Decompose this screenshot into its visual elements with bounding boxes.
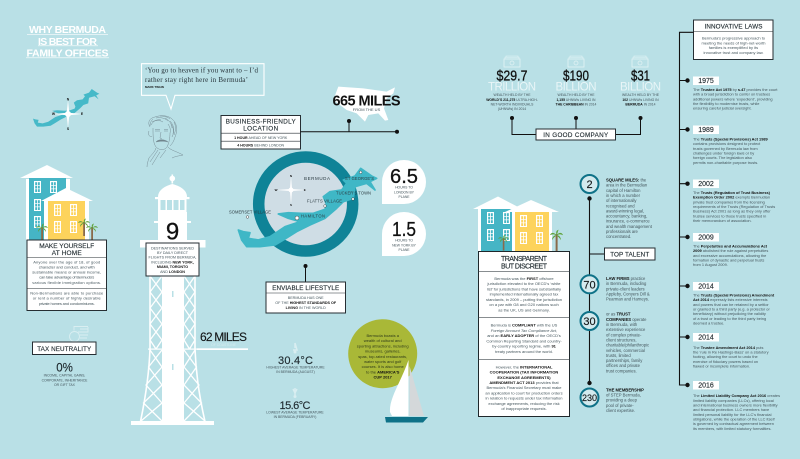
callout: culture and America's Cup: water sports and golf (364, 359, 402, 364)
panel: transparent but discreet: treaty partners around the world. (495, 349, 553, 354)
compass: N (290, 174, 292, 178)
illustration: white house left (20, 165, 98, 241)
callout: Mark Twain quote: MARK TWAIN (145, 85, 164, 89)
entry: 2002: exempts Bermudian (734, 195, 770, 200)
timeline: top talent (580, 175, 655, 406)
text: law firms: LAW FIRMS (606, 276, 630, 281)
panel: transparent but discreet: in relation to requests under tax information (486, 396, 562, 401)
entry: 2009: 2009 (693, 248, 702, 253)
panel: innovative laws: families is exemplified by its (709, 45, 758, 50)
entry: 2002: private trust companies from the licensing (693, 199, 765, 204)
panel: transparent but discreet: Bermuda is COMPLIANT with the US (491, 323, 558, 328)
entry: 2016: limited personal liability for the LLC’s financial (693, 412, 772, 417)
panel: transparent but discreet: standards, in 2009 – putting the jurisdiction (486, 297, 562, 302)
map: Bermuda in ring (238, 157, 377, 251)
entry: 2002: 2002 (698, 181, 714, 188)
panel: transparent but discreet: by-country reporting regime, with 91 (492, 344, 557, 348)
panel: tax neutrality (32, 342, 96, 387)
entry: 2014 trustee amendment: exercise of fiduciary powers based on (693, 359, 758, 364)
stat: Bermuda wealth: 102 UHNWIs LIVING IN (622, 98, 659, 102)
entry: 2014 trustee amendment (693, 333, 769, 368)
entry: 2016: limited liability companies (LLCs), offering local (693, 398, 774, 403)
panel: innovative laws: INNOVATIVE LAWS (704, 24, 762, 30)
stat: Caribbean wealth: $190 (563, 68, 589, 84)
entry: 2014 trusts amendment: and powers that can be retained by a settlor (693, 302, 769, 307)
panel: transparent but discreet (478, 252, 570, 416)
callout: Mark Twain quote: ‘You go to heaven if you want to – I’d (145, 67, 258, 75)
panel: make yourself at home: various flexible immigration options. (32, 280, 101, 285)
text: law firms: Pearman and Harneys. (606, 297, 649, 302)
callout: culture and America's Cup (348, 319, 417, 388)
text: square miles: accountancy, banking, (606, 214, 647, 219)
stat: hours to New York (382, 212, 426, 256)
compass: W (275, 188, 278, 192)
text: trust companies: trust companies. (606, 368, 637, 373)
text: trust companies: charitable/philanthropic (606, 343, 649, 348)
text: trust companies: client structures, (606, 337, 636, 342)
title (26, 24, 109, 60)
text: STEP membership: pool of private- (606, 403, 634, 408)
panel: tax neutrality: 0% (56, 362, 73, 374)
text: trust companies: partnerships, family (606, 358, 643, 363)
panel: business-friendly location: LOCATION (243, 125, 279, 132)
stat: hours to London: 6.5 (390, 166, 418, 188)
text: trust companies: operate (631, 317, 647, 322)
callout: culture and America's Cup: wealth of cultural and (364, 338, 402, 343)
text: trust companies: of complex private- (606, 332, 642, 337)
text: square miles: SQUARE MILES: (606, 178, 639, 182)
panel: transparent but discreet: Common Reporting Standard and country- (486, 338, 562, 343)
badge: 70: 70 (583, 280, 596, 292)
panel: make yourself at home: Non-Bermudians are able to purchase (30, 290, 104, 296)
entry: 1975: the flexibility to modernise trusts, while (693, 101, 759, 106)
entry: 2014 trustee amendment: 2014 (698, 335, 714, 342)
entry: 1975 (693, 76, 778, 111)
panel: enviable lifestyle: BERMUDA HAS ONE (288, 296, 324, 300)
stat: highest temperature: HIGHEST AVERAGE TEMPERATURE (266, 366, 325, 370)
panel: transparent but discreet: an application to court for production orders (485, 390, 563, 395)
text: trust companies: in Bermuda, with (606, 322, 638, 327)
entry: 2016: its members, with limited statutory formalities. (693, 426, 771, 431)
panel: tax neutrality: INCOME, CAPITAL GAINS, (44, 374, 85, 378)
stat: nine destinations (146, 218, 199, 276)
text: law firms: in Bermuda, including (606, 281, 647, 286)
stat: lowest temperature: IN BERMUDA (FEBRUARY) (274, 415, 316, 419)
panel: transparent but discreet: on a par with G8 and G20 nations such (489, 302, 559, 307)
callout: culture and America's Cup: CUP 2017 (374, 375, 393, 380)
compass: S (290, 203, 292, 207)
timeline: top talent: TOP TALENT (610, 252, 649, 258)
panel: business-friendly location: 1 HOUR AHEAD OF NEW YORK (234, 136, 288, 140)
entry: 2014 trusts amendment: Act 2014 (693, 297, 710, 302)
panel: enviable lifestyle: LIVING IN THE WORLD (286, 306, 326, 310)
text: square miles: the (639, 178, 647, 182)
panel: make yourself at home: MAKE YOURSELF (39, 243, 94, 250)
text: trust companies: TRUST (616, 312, 631, 317)
text: trust companies: offices and private (606, 363, 641, 368)
stat: world wealth: (UHNWIs) IN 2014 (498, 107, 526, 111)
panel: business-friendly location: 4 HOURS BEHIND LONDON (237, 144, 285, 148)
icon: small Bermuda map with compass: W (52, 112, 56, 116)
stat: lowest temperature: LOWEST AVERAGE TEMPERATURE (266, 410, 324, 414)
entry: 1989: trusts governed by Bermuda law from (693, 146, 758, 151)
text: trust companies: extensive experience (606, 327, 646, 332)
stat: nine destinations: DESTINATIONS SERVED (151, 246, 194, 250)
text: square miles: capital of Hamilton (606, 188, 641, 193)
entry: 2002 (693, 180, 775, 223)
stat: Caribbean wealth: 1,155 UHNWIs LIVING IN (556, 98, 596, 102)
stat: nine destinations: BY DAILY DIRECT (157, 251, 189, 255)
text: square miles: recognised and (606, 203, 635, 208)
entry: 2014 trusts amendment: 2014 (698, 284, 714, 291)
panel: transparent but discreet: COOPERATION (TAX INFORMATION (490, 370, 558, 375)
icon: small Bermuda map with compass: E (81, 112, 84, 116)
text: trust companies: or as (606, 312, 616, 317)
panel: transparent but discreet: as the UK, US and Germany. (498, 308, 550, 312)
entry: 2009 (693, 233, 768, 267)
panel: transparent but discreet: AMENDMENT ACT 2013 provides that (489, 380, 559, 385)
entry: 2002: their memorandum of association. (693, 218, 752, 223)
stat: lowest temperature (266, 388, 324, 419)
badge: 230 (580, 388, 598, 406)
stat: hours to London: HOURS TO (395, 186, 413, 190)
map labels: FLATTS VILLAGE (307, 198, 342, 204)
panel: make yourself at home (27, 240, 106, 310)
map labels: SOMERSET VILLAGE (229, 210, 271, 214)
map labels: HAMILTON (301, 214, 325, 218)
panel: enviable lifestyle (266, 264, 346, 313)
stat: hours to London: PLANE (398, 195, 410, 199)
entry: 2014 trusts amendment: beneficiary) without prejudicing the validity (693, 311, 766, 316)
callout: Mark Twain quote: rather stay right here in Bermuda’ (145, 76, 248, 84)
stat: hours to New York: PLANE (398, 248, 410, 252)
text: STEP membership: client expertise. (606, 408, 635, 413)
panel: in good company: IN GOOD COMPANY (543, 132, 609, 139)
title: FAMILY OFFICES (26, 48, 108, 60)
callout: culture and America's Cup: sporting attractions, including (357, 343, 409, 348)
stat: hours to London (382, 160, 426, 204)
panel: transparent but discreet: of inappropriate requests. (501, 406, 547, 411)
callout: culture and America's Cup: courses. It is also home (362, 364, 404, 369)
stat: Bermuda wealth: $31 (631, 68, 650, 84)
stat: Bermuda wealth: BILLION (620, 81, 661, 93)
text: law firms: private-client leaders (606, 286, 645, 291)
stat: hours to New York: 1.5 (392, 219, 416, 241)
panel: transparent but discreet: Foreign Account Tax Compliance Act, (491, 328, 557, 333)
entry: 2014 trusts amendment (693, 282, 775, 325)
badge: 230: 230 (582, 393, 597, 403)
text: square miles: award-winning legal, (606, 208, 644, 213)
callout: Mark Twain quote (142, 64, 264, 109)
map: Bermuda islands (238, 168, 377, 247)
entry: 2009: formation of dynastic and perpetual trusts (693, 257, 764, 262)
stat: Caribbean wealth: THE CARIBBEAN IN 2014 (556, 102, 597, 106)
entry: 2014 trusts amendment: deemed a trustee. (693, 320, 724, 325)
text: law firms: practice (630, 276, 646, 281)
entry: 2009: 2009 (698, 235, 714, 242)
stat: 62 miles: 62 MILES (200, 330, 247, 344)
text: square miles: area in the Bermudian (606, 183, 648, 188)
stat: Bermuda wealth (620, 56, 661, 106)
illustration: lighthouse (131, 174, 214, 425)
callout: culture and America's Cup: Bermuda boasts a (366, 333, 400, 338)
stat: world wealth: WEALTH HELD BY THE (494, 93, 531, 97)
panel: transparent but discreet: However, the INTERNATIONAL (496, 364, 553, 369)
entry: 1989: foreign courts. The legislation also (693, 155, 752, 160)
stat: highest temperature (266, 343, 325, 374)
entry: 1975: The (693, 87, 701, 92)
entry: 1975: 1975 (698, 78, 714, 85)
text: square miles: insurance, e-commerce (606, 219, 650, 224)
text: STEP membership: THE MEMBERSHIP (606, 387, 644, 392)
entry: 2016: and international business owners more flexibility (693, 402, 778, 408)
panel: transparent but discreet: Bermuda’s Financial Secretary must make (486, 385, 562, 390)
stat: hours to London: LONDON BY (394, 190, 415, 194)
panel: transparent but discreet: BUT DISCREET (501, 264, 548, 270)
connector: location to US (300, 119, 399, 134)
callout: culture and America's Cup: spas, top-rated restaurants, (358, 354, 407, 359)
panel: transparent but discreet: Bermuda was the FIRST offshore (494, 276, 554, 281)
stat: world wealth: WORLD’S 211,275 ULTRA-HIGH- (486, 98, 538, 102)
panel: transparent but discreet: implemented internationally agreed tax (490, 292, 558, 297)
map labels (229, 171, 374, 220)
entry: 2014 trusts amendment: expressly lists extensive interests (709, 297, 768, 302)
title: WHY BERMUDA (29, 24, 106, 36)
text: STEP membership: providing a deep (606, 398, 638, 403)
entry: 1989: Trusts (Special Provisions) Act 1989 (701, 136, 769, 142)
distance from the US with map: FROM THE US (353, 107, 381, 112)
text: square miles: and wealth management (606, 224, 653, 229)
panel: make yourself at home: sustainable means or annual income, (32, 270, 101, 275)
entry: 2016: Limited Liability Company Act 2016 creates (701, 393, 780, 398)
panel: transparent but discreet: EXCHANGE AGREEMENTS) (497, 375, 551, 380)
entry: 2016: The (693, 393, 701, 398)
entry: 2002: The (693, 190, 701, 195)
entry: 1989 (693, 126, 769, 165)
entry: 1975: with a broad jurisdiction to confer on trustees (693, 92, 770, 97)
stat: world wealth (486, 56, 538, 111)
panel: make yourself at home: private homes and condominiums. (39, 301, 95, 306)
icon: coins (70, 326, 88, 342)
panel: in good company (510, 116, 642, 140)
title: IS BEST FOR (38, 36, 97, 48)
entry: 2014 trusts amendment: The (693, 292, 701, 298)
panel: make yourself at home: AT HOME (52, 250, 82, 257)
text: square miles: of internationally (606, 198, 637, 203)
panel: transparent but discreet: list’ for jurisdictions that have substantially (487, 286, 561, 291)
badge: 2 (580, 175, 598, 193)
badge: 30 (580, 312, 598, 330)
panel: make yourself at home: character and conduct, and with (39, 264, 95, 270)
panel: tax neutrality: CORPORATE, INHERITANCE (42, 378, 88, 382)
entry: 2002: Exemption Order 2002 (693, 195, 735, 200)
stat: hours to New York: HOURS TO (395, 239, 413, 243)
panel: tax neutrality: TAX NEUTRALITY (37, 346, 92, 353)
stat: world wealth: NET-WORTH INDIVIDUALS (491, 102, 534, 106)
stat: 62 miles: OF COASTLINE (211, 343, 237, 347)
entry: 1975: Trustee Act 1975 by s.47 provides the court (701, 87, 777, 92)
entry: 2016 (693, 381, 780, 431)
entry: 1975: ensuring careful judicial oversight. (693, 106, 752, 111)
icon: small Bermuda map with compass (33, 89, 99, 131)
text: law firms: Appleby, Conyers Dill & (606, 291, 650, 296)
panel: transparent but discreet: TRANSPARENT (501, 256, 548, 263)
stat: nine destinations: FLIGHTS FROM BERMUDA, (149, 256, 196, 260)
entry: 2009: from 1 August 2009. (693, 262, 728, 267)
panel: business-friendly location (221, 116, 300, 149)
entry: 2016: obligations, while the operation of the LLC itself (693, 416, 775, 421)
entry: 2009: The (693, 244, 701, 248)
icon: small Bermuda map with compass: N (67, 98, 70, 102)
stat: Caribbean wealth: BILLION (556, 81, 596, 93)
entry: 2014 trustee amendment: the ‘rule in Re Hastings-Bass’ on a statutory (693, 349, 769, 354)
entry: 1989: 1989 (698, 127, 714, 134)
panel: innovative laws (694, 20, 773, 60)
stat: highest temperature: IN BERMUDA (AUGUST) (276, 370, 315, 374)
panel: transparent but discreet: and an EARLY ADOPTER of the OECD’s (487, 333, 561, 338)
entry: 2002: Business) Act 2001 as long as they only offer (693, 209, 771, 214)
text: square miles: in which a number (606, 193, 641, 198)
illustration: houses centre (473, 196, 563, 252)
compass (275, 174, 306, 207)
entry: 2009: and excessive accumulations, allowing the (693, 253, 766, 258)
badge: 2: 2 (586, 179, 593, 191)
entry: 2016: and financial protection. LLC members have (693, 407, 769, 412)
entry: 2002: trustee services to those trusts specified in (693, 213, 766, 218)
map labels: ST GEORGE’S (345, 176, 374, 181)
panel: transparent but discreet: jurisdiction elevated to the OECD’s ‘white (486, 281, 561, 286)
panel: enviable lifestyle: ENVIABLE LIFESTYLE (272, 285, 339, 292)
entry: 1975: additional powers where ‘expedient’, providing (693, 96, 773, 101)
panel: make yourself at home: Anyone over the age of 18, of good (33, 260, 100, 264)
text: square miles: professionals are (606, 229, 639, 234)
panel: business-friendly location: BUSINESS-FRIENDLY (226, 119, 296, 126)
stat: 62 miles (197, 330, 248, 350)
entry: 1989: contains provisions designed to protect (693, 141, 761, 146)
map labels: TUCKER’S TOWN (336, 190, 371, 196)
text: trust companies: COMPANIES (606, 317, 631, 322)
badge: 30: 30 (583, 316, 596, 328)
entry: 2014 trustee amendment: Trustee Amendment Act 2014 puts (701, 345, 763, 350)
panel: innovative laws: innovative trust and company law. (703, 50, 764, 55)
entry: 2002: Trusts (Regulation of Trust Business) (701, 190, 771, 195)
entry: 1989: challenges under foreign laws or by (693, 150, 754, 155)
entry: 2016: 2016 (698, 383, 714, 390)
stat: Bermuda wealth: BERMUDA IN 2014 (625, 102, 656, 106)
badge: 70 (580, 275, 598, 293)
text: STEP membership: of STEP Bermuda, (606, 393, 641, 398)
stat: world wealth: TRILLION (488, 81, 536, 93)
stat: hours to New York: NEW YORK BY (392, 243, 417, 247)
entry: 2009: abolished the rule against perpetuities (702, 248, 768, 253)
stat: highest temperature: 30.4°C (278, 355, 313, 367)
stat: nine destinations: 9 (166, 218, 179, 245)
entry: 2002: requirements of the Trusts (Regulation of Trusts (693, 204, 775, 209)
timeline: laws spine (680, 32, 694, 387)
text: square miles: concentrated. (606, 234, 631, 239)
entry: 2014 trustee amendment: footing, allowing the court to undo the (693, 354, 758, 359)
entry: 2014 trusts amendment: Trusts (Special Provisions) Amendment (701, 292, 775, 298)
panel: make yourself at home: or rent a number of highly desirable (33, 296, 101, 301)
entry: 2014 trusts amendment: of a trust or leading to the third party being (693, 316, 766, 321)
stat: lowest temperature: 15.6°C (280, 400, 311, 412)
text: trust companies: trusts, limited (606, 353, 631, 358)
panel: tax neutrality: OR GIFT TAX (54, 383, 76, 387)
text: trust companies: vehicles, commercial (606, 348, 645, 353)
entry: 2014 trustee amendment: flawed or incomplete information. (693, 363, 750, 368)
compass: E (304, 188, 306, 192)
stat: Caribbean wealth (556, 56, 597, 106)
callout: culture and America's Cup: to the AMERICA’S (366, 369, 400, 374)
distance from the US with map (332, 87, 401, 122)
entry: 2014 trustee amendment: The (693, 345, 701, 350)
entry: 2014 trusts amendment: or granted to a third party (e.g. a protector or (693, 306, 770, 311)
icon: sailboat (385, 360, 428, 422)
panel: make yourself at home: can take advantage of Bermuda’s (39, 275, 94, 280)
map labels: BERMUDA (304, 176, 330, 181)
panel: innovative laws: meeting the needs of high-net-worth (701, 40, 766, 45)
stat: nine destinations: INCLUDING NEW YORK, (151, 260, 194, 264)
panel: innovative laws: Bermuda’s progressive approach to (702, 36, 766, 40)
panel: enviable lifestyle: OF THE HIGHEST STANDARDS OF (275, 301, 337, 305)
illustration: Mark Twain portrait (147, 116, 183, 167)
stat: Bermuda wealth: WEALTH HELD BY THE (622, 93, 660, 97)
stat: Caribbean wealth: WEALTH HELD BY THE (558, 93, 595, 97)
stat: nine destinations: MIAMI, TORONTO (157, 265, 188, 269)
stat: world wealth: $29.7 (496, 68, 528, 84)
icon: small Bermuda map with compass: S (67, 127, 70, 131)
entry: 1989: permits non-charitable purpose trusts. (693, 160, 758, 165)
entry: 2009: Perpetuities and Accumulations Act (701, 244, 768, 248)
distance from the US with map: 665 MILES (332, 94, 401, 110)
stat: nine destinations: AND LONDON (160, 270, 185, 274)
callout: culture and America's Cup: museums, galleries, (365, 349, 400, 354)
entry: 2016: is governed by contractual agreement between (693, 421, 774, 426)
panel: transparent but discreet: exchange agreements, reducing the risk (488, 401, 560, 406)
entry: 1989: The (693, 136, 701, 142)
